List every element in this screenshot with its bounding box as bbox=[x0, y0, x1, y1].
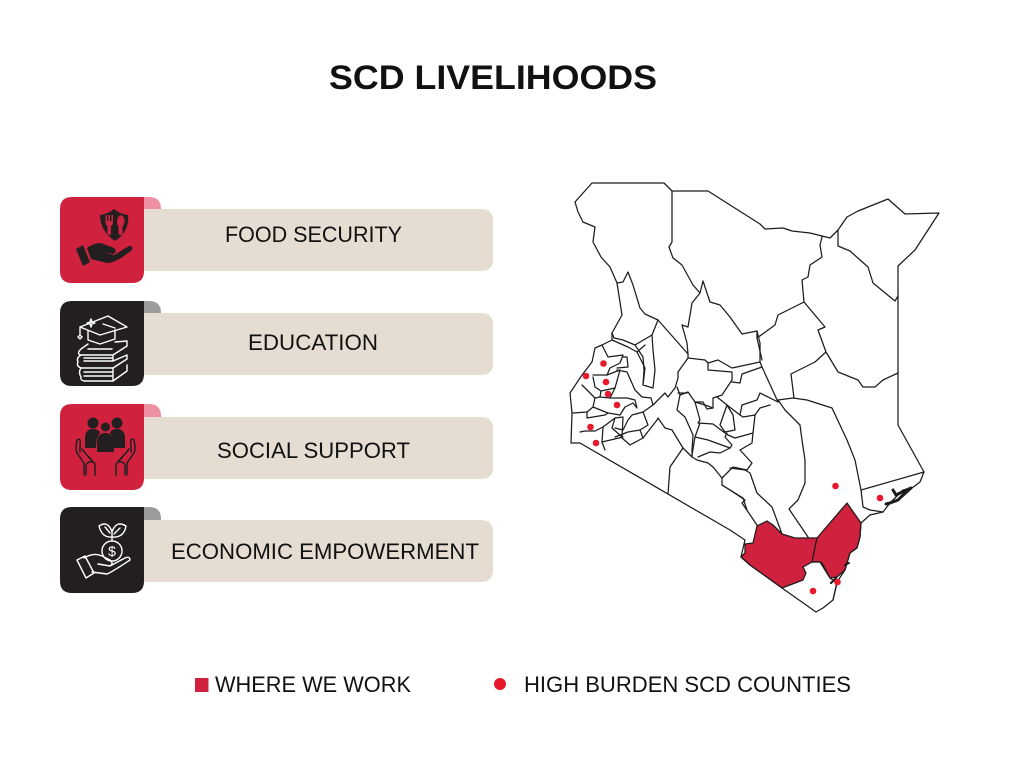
mangrove coastline detail bbox=[886, 488, 911, 504]
panel: economic empowerment bbox=[60, 507, 493, 593]
panel: social support: SOCIAL SUPPORT bbox=[217, 438, 410, 463]
panel: food security bbox=[60, 197, 493, 283]
panel: education: EDUCATION bbox=[248, 330, 378, 355]
north bbox=[669, 191, 700, 358]
panel: social support bbox=[60, 404, 493, 490]
country outline bbox=[570, 183, 939, 612]
legend: where we work: WHERE WE WORK bbox=[215, 672, 411, 697]
icon: hand holding coin with sprout bbox=[60, 507, 144, 593]
title: SCD LIVELIHOODS bbox=[329, 59, 657, 97]
south bbox=[730, 468, 782, 534]
icon: graduation cap on books bbox=[60, 301, 144, 386]
icon: hands supporting people bbox=[60, 404, 144, 490]
panel: education bbox=[60, 301, 493, 386]
county boundaries bbox=[573, 191, 924, 600]
where we work: Kajiado-area county bbox=[741, 521, 817, 588]
red dots: high burden counties bbox=[583, 360, 883, 594]
icon: hand holding shield with cutlery bbox=[60, 197, 144, 283]
central bbox=[642, 358, 688, 405]
legend: high burden SCD counties: HIGH BURDEN SCD COUNTIES bbox=[524, 672, 851, 697]
panel: economic empowerment: ECONOMIC EMPOWERMENT bbox=[171, 539, 479, 564]
west bbox=[593, 345, 623, 375]
icon: hand holding coin with sprout: $ bbox=[108, 543, 116, 559]
map of Kenya counties bbox=[570, 183, 939, 612]
where we work: coastal county bbox=[812, 503, 861, 578]
panel: food security: FOOD SECURITY bbox=[225, 222, 402, 247]
